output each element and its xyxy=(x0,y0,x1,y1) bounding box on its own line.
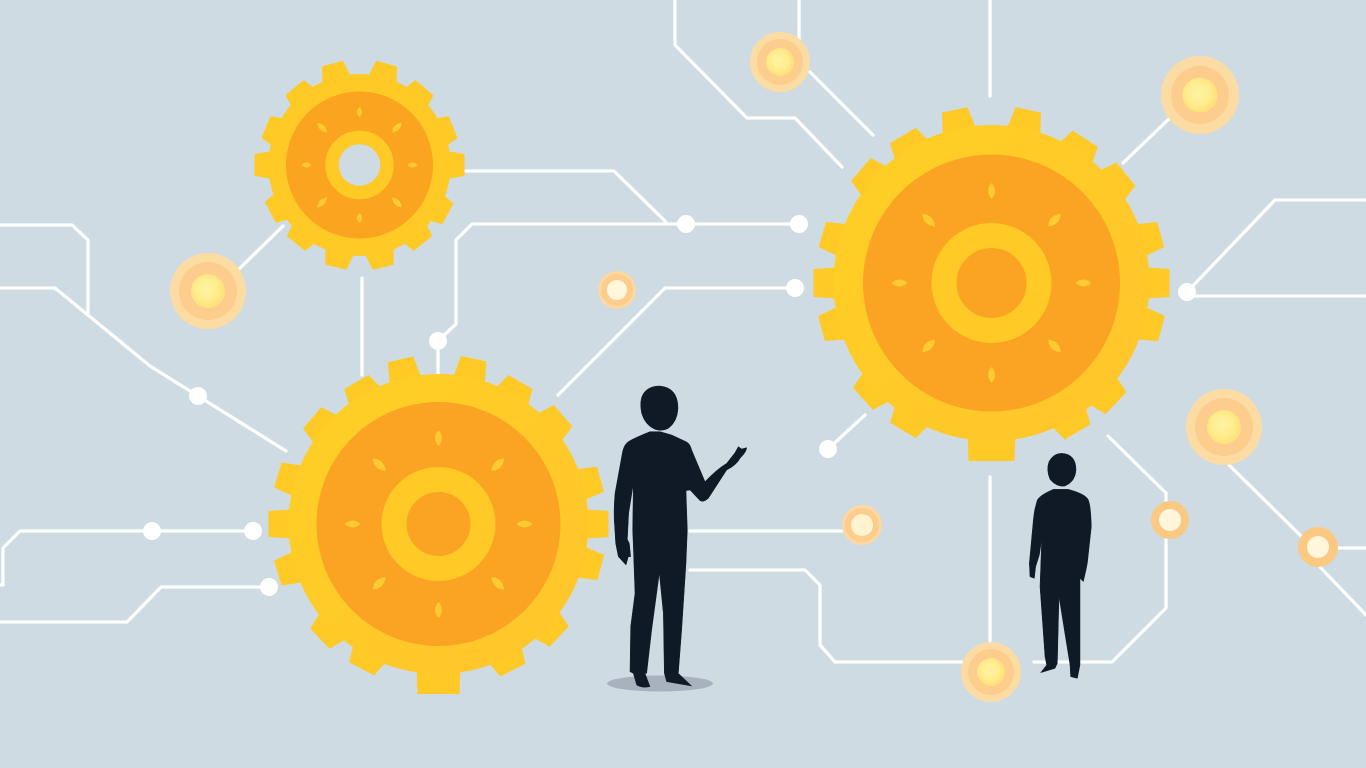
gear petals xyxy=(302,107,418,223)
gear: lower left large xyxy=(268,355,608,694)
glowing node: left xyxy=(170,253,246,329)
white connector nodes xyxy=(143,215,1196,596)
gear: right large xyxy=(814,106,1170,461)
gear hub ring xyxy=(944,236,1039,330)
glowing node: top right xyxy=(1161,56,1239,134)
gear orange disc xyxy=(863,154,1120,412)
gear teeth xyxy=(814,106,1170,461)
glowing node: mid lower xyxy=(842,505,882,545)
gear hub ring xyxy=(332,138,387,192)
gear body xyxy=(834,125,1150,441)
glowing node: top centre xyxy=(750,32,810,92)
glowing node: right xyxy=(1186,389,1262,465)
glowing node: centre small xyxy=(598,271,636,309)
gear orange disc xyxy=(286,92,433,238)
glowing node: near small figure xyxy=(1151,501,1189,539)
glowing node: far right xyxy=(1298,527,1338,567)
gear body xyxy=(268,74,450,256)
gear: top left small xyxy=(256,61,464,270)
ground shadow xyxy=(607,676,713,692)
gear petals xyxy=(892,183,1092,383)
gear teeth xyxy=(256,61,464,270)
gear hub ring xyxy=(394,480,483,568)
person: large figure gesturing xyxy=(607,386,747,692)
gear orange disc xyxy=(316,402,560,646)
person: small figure standing xyxy=(1029,453,1091,678)
gear petals xyxy=(344,430,532,618)
gear body xyxy=(288,374,588,674)
glowing node: bottom xyxy=(961,642,1021,702)
gear teeth xyxy=(268,355,608,694)
silhouette xyxy=(614,386,747,687)
